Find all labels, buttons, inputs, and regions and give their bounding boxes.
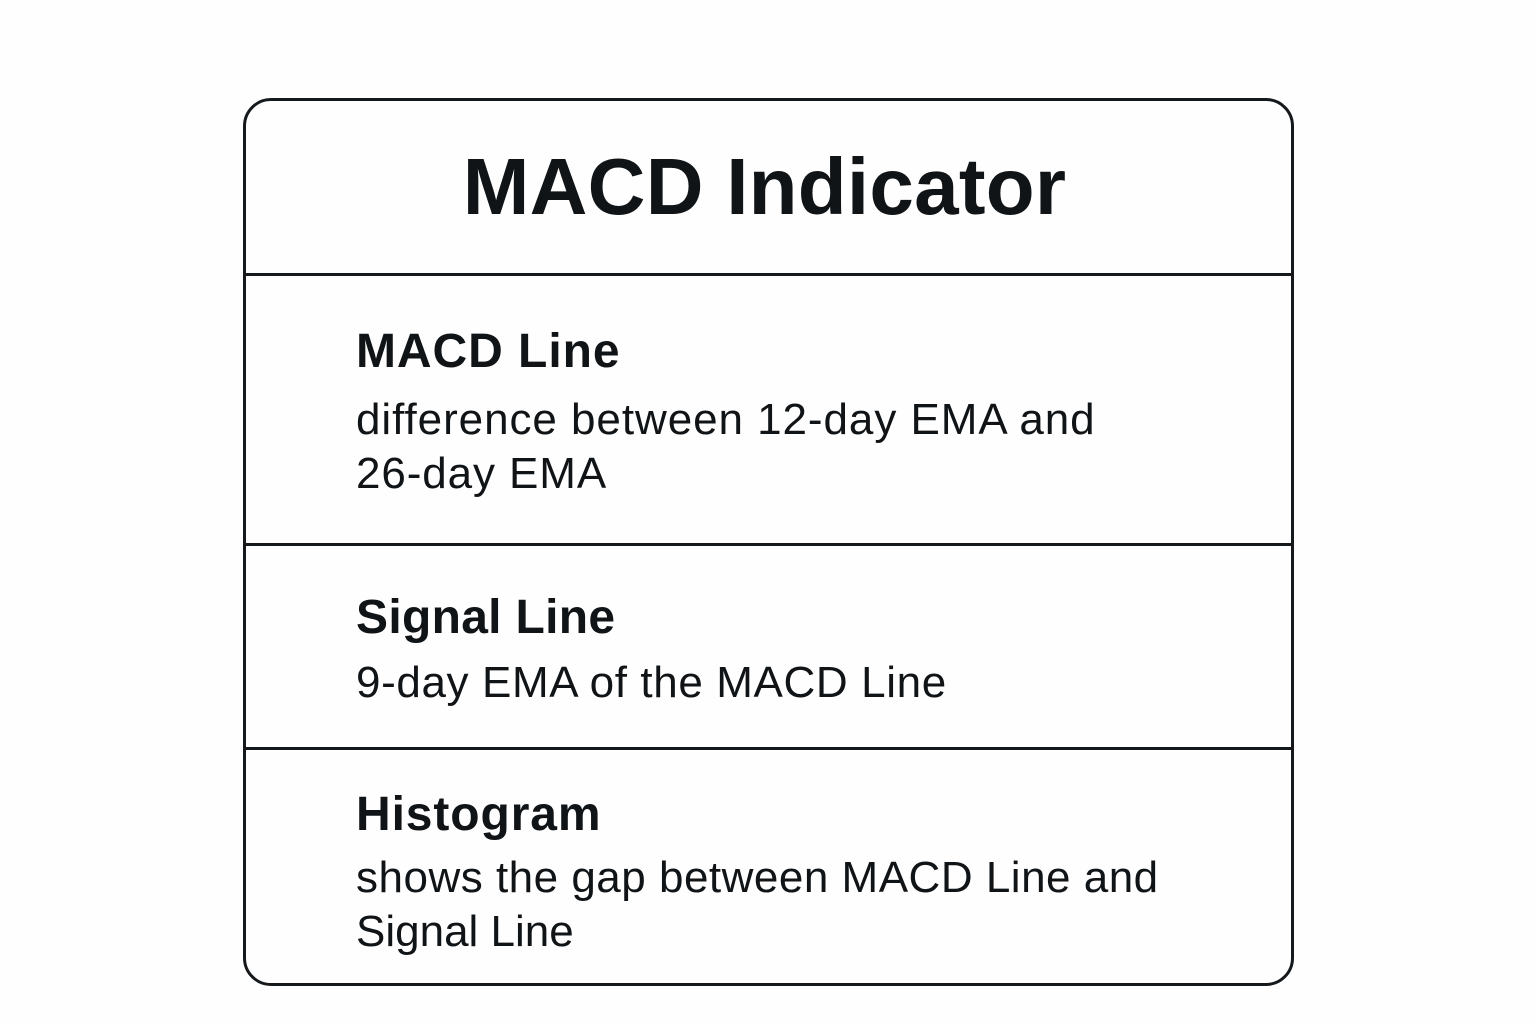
text: MACD Line description: 26-day EMA: [356, 449, 607, 498]
title: MACD Indicator: [463, 142, 1066, 231]
text: Histogram description: Signal Line: [356, 907, 574, 956]
heading: MACD Line: MACD Line: [356, 325, 621, 378]
text: Histogram description: [356, 853, 1159, 956]
text: Signal Line description: 9-day EMA of the MACD Line: [356, 658, 947, 707]
heading: Signal Line: Signal Line: [356, 591, 615, 644]
text: MACD Line description: difference between 12-day EMA and: [356, 395, 1096, 444]
text: Histogram description: shows the gap between MACD Line and: [356, 853, 1159, 902]
panel: MACD indicator card: [243, 98, 1294, 986]
heading: Histogram: Histogram: [356, 788, 601, 841]
text: MACD Line description: [356, 395, 1096, 498]
